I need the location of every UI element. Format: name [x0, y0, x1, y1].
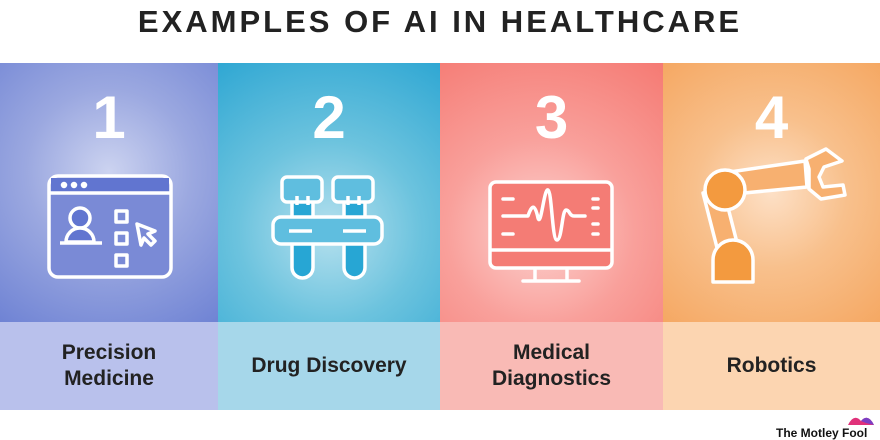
label: medical diagnostics — [440, 322, 663, 410]
label: robotics — [663, 322, 880, 410]
label: drug discovery — [218, 322, 440, 410]
icon: browser with person — [47, 174, 173, 279]
title: EXAMPLES OF AI IN HEALTHCARE — [138, 4, 742, 39]
panel: robotics — [663, 63, 880, 322]
panel: precision medicine — [0, 63, 218, 322]
panel: medical diagnostics — [440, 63, 663, 322]
label: precision medicine: Medicine — [64, 367, 154, 390]
label: medical diagnostics: Diagnostics — [492, 367, 611, 390]
number 2: 2 — [312, 84, 346, 151]
number 4: 4 — [755, 84, 788, 151]
icon: monitor with heartbeat — [488, 180, 614, 283]
panel: drug discovery — [218, 63, 440, 322]
logo: the motley fool — [776, 418, 874, 440]
icon: test tubes — [271, 175, 384, 280]
label: precision medicine: Precision — [62, 341, 156, 364]
icon: robotic arm — [701, 147, 847, 284]
label: precision medicine — [0, 322, 218, 410]
number 1: 1 — [92, 84, 126, 151]
label: drug discovery: Drug Discovery — [251, 354, 407, 377]
logo: the motley fool: The Motley Fool — [776, 426, 867, 440]
number 3: 3 — [535, 84, 568, 151]
label: medical diagnostics: Medical — [513, 341, 590, 364]
label: robotics: Robotics — [727, 354, 816, 377]
